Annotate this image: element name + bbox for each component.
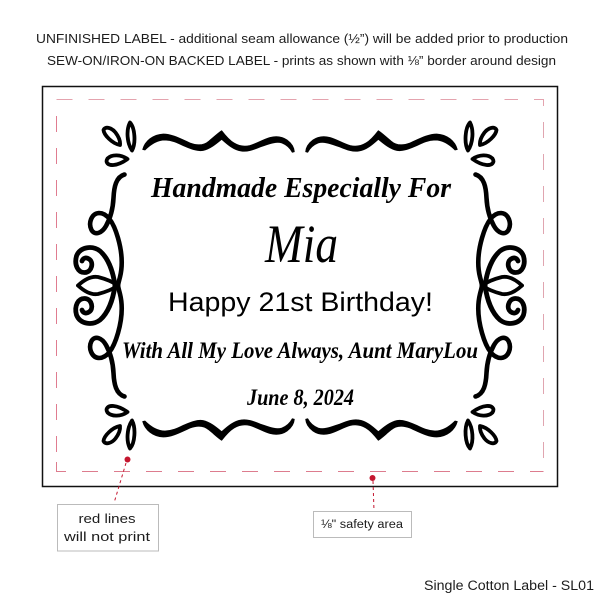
callout text: ⅛" safety area	[321, 519, 404, 531]
top right corner	[534, 100, 544, 106]
instruction line 1: UNFINISHED LABEL - additional seam allowance (½”) will be added prior to production	[36, 31, 568, 46]
ornamental border	[76, 122, 524, 448]
label outline	[42, 86, 558, 486]
instruction line 2: SEW-ON/IRON-ON BACKED LABEL - prints as shown with ⅛” border around design	[47, 53, 556, 68]
callout leader	[114, 463, 126, 503]
callout dot	[124, 456, 130, 462]
label text	[122, 173, 478, 410]
right dashed line	[542, 122, 544, 471]
top dashed line	[56, 98, 518, 100]
callout text: red lines	[78, 511, 136, 526]
safety area dashed guide	[56, 100, 544, 472]
date: June 8, 2024	[246, 385, 354, 410]
left dashed line	[56, 116, 58, 452]
occasion: Happy 21st Birthday!	[168, 287, 433, 317]
message: With All My Love Always, Aunt MaryLou	[122, 338, 478, 363]
product name: Single Cotton Label - SL01	[424, 578, 594, 593]
callout box	[58, 504, 158, 551]
callout: red lines: will not print	[63, 529, 150, 544]
callout leader	[373, 481, 374, 511]
callout: safety area	[314, 475, 412, 538]
name: Mia	[264, 214, 338, 274]
instruction header	[36, 31, 568, 68]
heading script: Handmade Especially For	[150, 173, 452, 204]
callout box	[314, 512, 412, 538]
callout dot	[370, 475, 376, 481]
callout: red lines	[58, 456, 158, 551]
bottom dashed line	[82, 470, 544, 472]
bottom left corner	[56, 462, 66, 472]
